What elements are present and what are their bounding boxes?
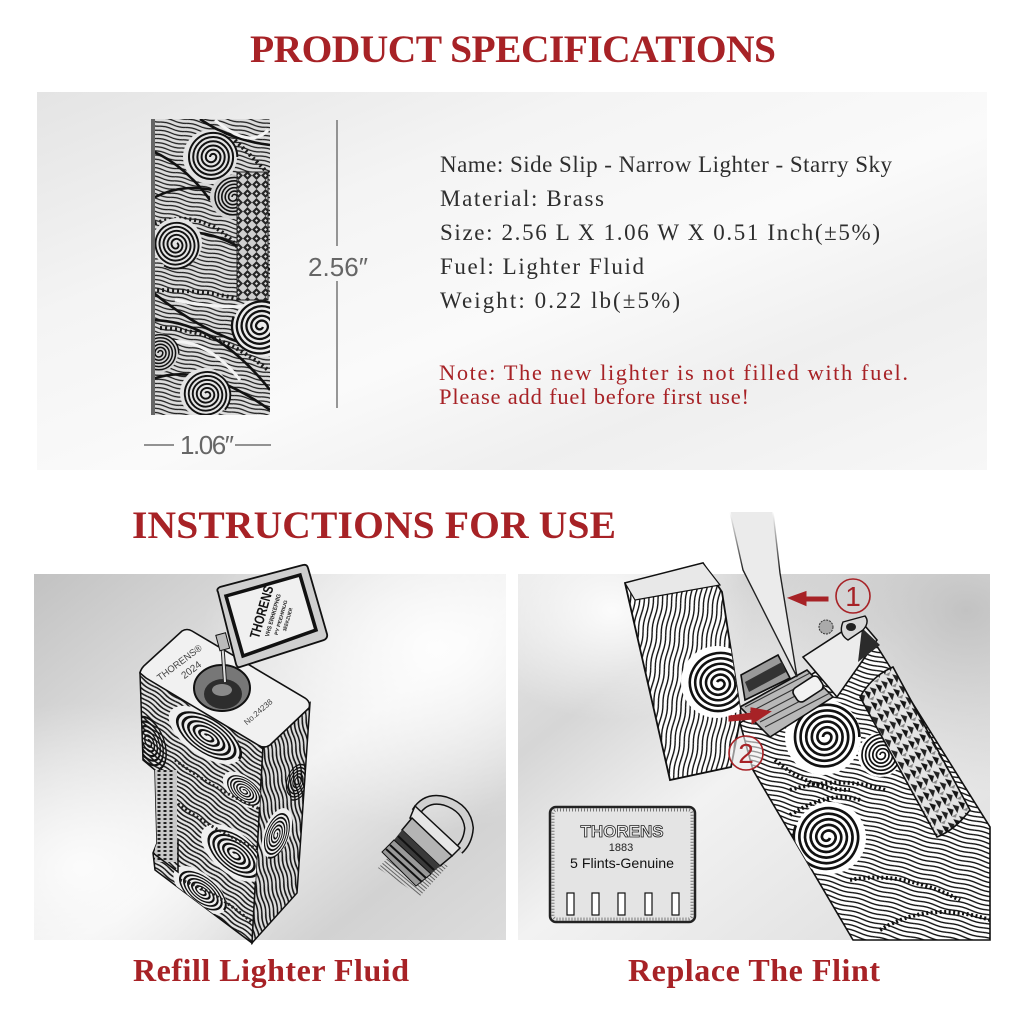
illustration: tweezers [730, 512, 797, 677]
illustration: lighter body [127, 673, 314, 943]
panel: specifications [37, 92, 987, 470]
flint slots [567, 893, 679, 915]
engraving: serial number: No.24238 [242, 697, 275, 727]
illustration: filler screw [378, 800, 469, 896]
caption: refill lighter fluid: Refill Lighter Fluid [133, 952, 409, 988]
text block: specification list: Fuel: Lighter Fluid [440, 254, 644, 279]
panel: replace the flint [518, 512, 990, 940]
card label: 5 Flints-Genuine [570, 855, 674, 871]
brand logo text: THORENS [580, 822, 664, 841]
illustration: lid [624, 562, 742, 782]
card: flint pack [550, 807, 695, 922]
illustration: flint plate and wheel housing [740, 616, 880, 737]
year: 1883 [609, 842, 633, 854]
note: fuel warning: Please add fuel before first use! [439, 384, 749, 409]
heading: instructions for use: INSTRUCTIONS FOR USE [132, 503, 616, 547]
note: fuel warning [439, 360, 908, 409]
text block: specification list: Material: Brass [440, 186, 604, 211]
illustration: open lid [217, 565, 327, 667]
text block: specification list: Size: 2.56 L X 1.06 W X 0.51 Inch(±5%) [440, 220, 880, 245]
illustration: lighter top face [140, 630, 310, 747]
panel: refill lighter fluid [34, 565, 506, 943]
illustration: knurled strip [860, 667, 970, 837]
engraving: thorens 2024: 2024 [180, 659, 204, 682]
badge: step 1 [836, 579, 870, 613]
illustration: lighter body open [740, 635, 990, 940]
badge: step 2 [729, 736, 763, 770]
engraving: thorens 2024: THORENS® [155, 643, 205, 684]
text block: specification list: Name: Side Slip - Narrow Lighter - Starry Sky [440, 152, 892, 177]
arrow: step 2 [730, 709, 768, 722]
illustration: open lid: 3EEKZUER [282, 607, 295, 632]
dimension: width 1.06 inches [144, 430, 271, 460]
title: product specifications: PRODUCT SPECIFICATIONS [250, 27, 776, 71]
badge: step 2: 2 [738, 738, 754, 769]
dimension: height 2.56 inches: 2.56″ [308, 252, 368, 282]
illustration: open lid: PY PEEHRIUG [274, 600, 289, 636]
photo: lighter front view [151, 119, 270, 415]
text block: specification list: Weight: 0.22 lb(±5%) [440, 288, 680, 313]
caption: replace the flint: Replace The Flint [628, 952, 880, 988]
badge: step 1: 1 [845, 581, 861, 612]
engraving: thorens 2024 [155, 643, 212, 694]
dimension: width 1.06 inches: 1.06″ [180, 430, 234, 460]
note: fuel warning: Note: The new lighter is not filled with fuel. [439, 360, 908, 385]
text block: specification list [440, 152, 892, 313]
illustration: open lid: THORENS [246, 584, 277, 640]
arrow: step 1 [791, 593, 827, 604]
illustration: open lid: VHS ERHKEPHIG [265, 593, 283, 638]
